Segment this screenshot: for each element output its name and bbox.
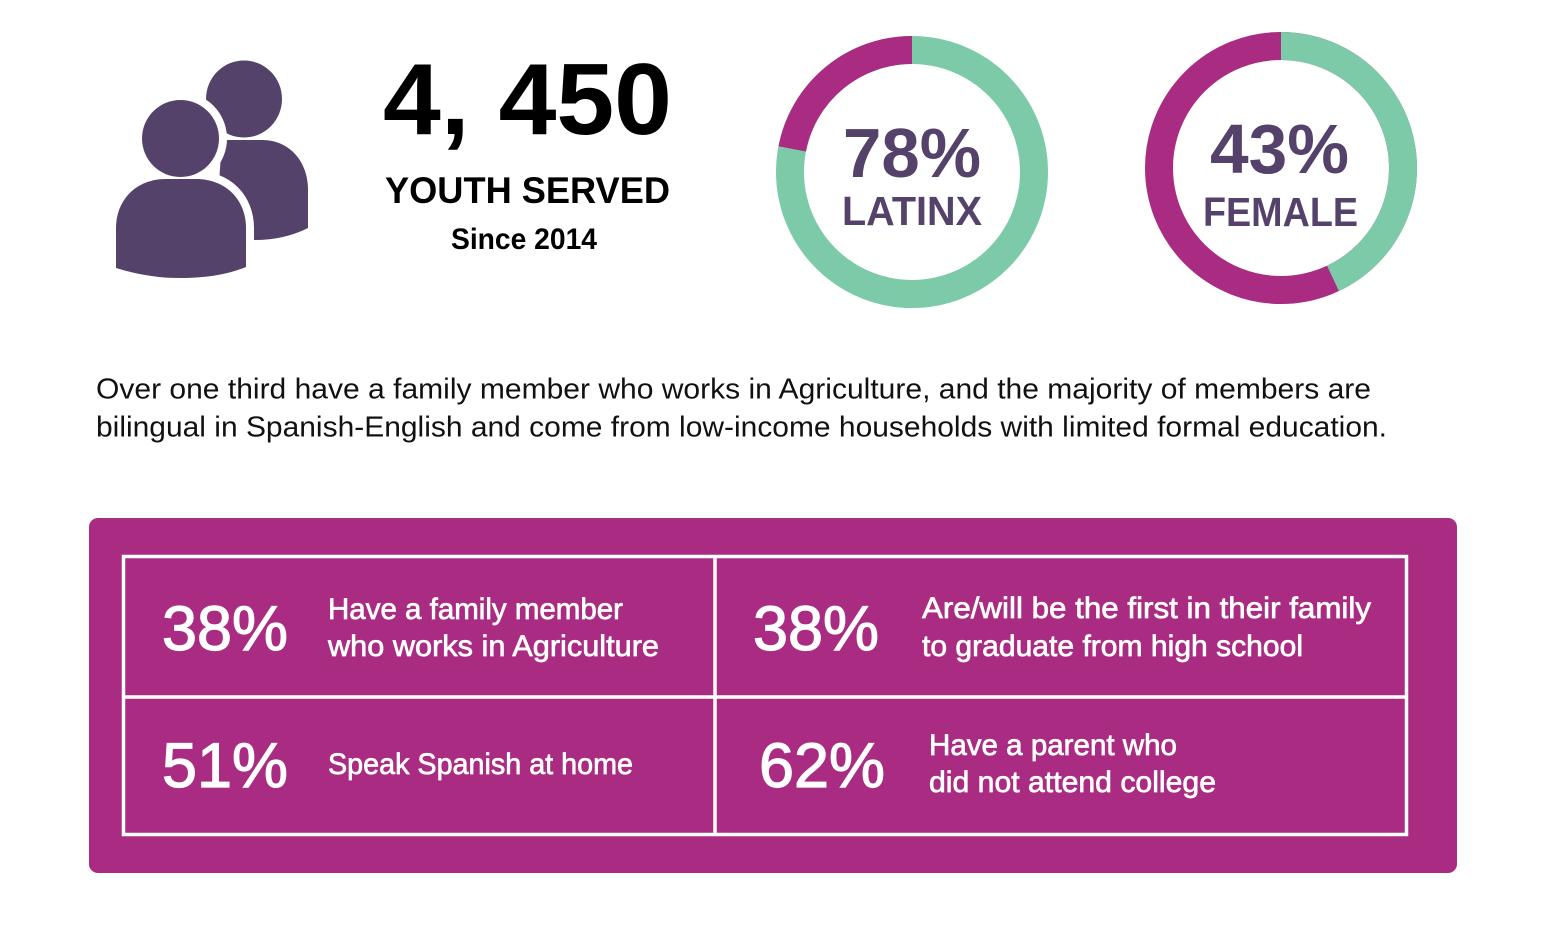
stat: agriculture [162,593,659,664]
stat: spanish at home: 51% [162,731,288,801]
label: FEMALE [1203,189,1358,235]
table grid [124,556,1406,834]
stat: spanish at home [162,731,633,801]
since year: Since 2014 [451,223,597,256]
panel: statistics [89,518,1457,873]
stat: parent no college: did not attend college [929,766,1216,799]
donut chart: 78% latinx [790,50,1034,294]
stat: agriculture: who works in Agriculture [327,630,659,663]
stat: spanish at home: Speak Spanish at home [328,748,633,781]
stat: first to graduate [753,592,1371,664]
stat: first to graduate: 38% [753,594,879,664]
stat: parent no college [759,729,1216,801]
stat: first to graduate: to graduate from high school [922,630,1303,663]
description paragraph: bilingual in Spanish-English and come from low-income households with limited formal education. [96,412,1387,444]
percentage: 43% [1210,110,1349,188]
description paragraph: Over one third have a family member who works in Agriculture, and the majority of members are [96,374,1371,406]
percentage: 78% [843,114,981,192]
stat: parent no college: Have a parent who [929,729,1177,762]
stat: agriculture: 38% [162,594,288,664]
stat: parent no college: 62% [759,731,885,801]
headline: youth served [383,44,672,256]
total count: 4, 450 [383,44,672,156]
icon: two people [116,60,308,278]
stat: first to graduate: Are/will be the first in their family [922,592,1371,625]
count label: YOUTH SERVED [385,170,670,211]
donut chart: 43% female [1159,46,1403,290]
stat: agriculture: Have a family member [328,593,623,626]
label: LATINX [842,188,982,234]
description paragraph [96,374,1387,444]
